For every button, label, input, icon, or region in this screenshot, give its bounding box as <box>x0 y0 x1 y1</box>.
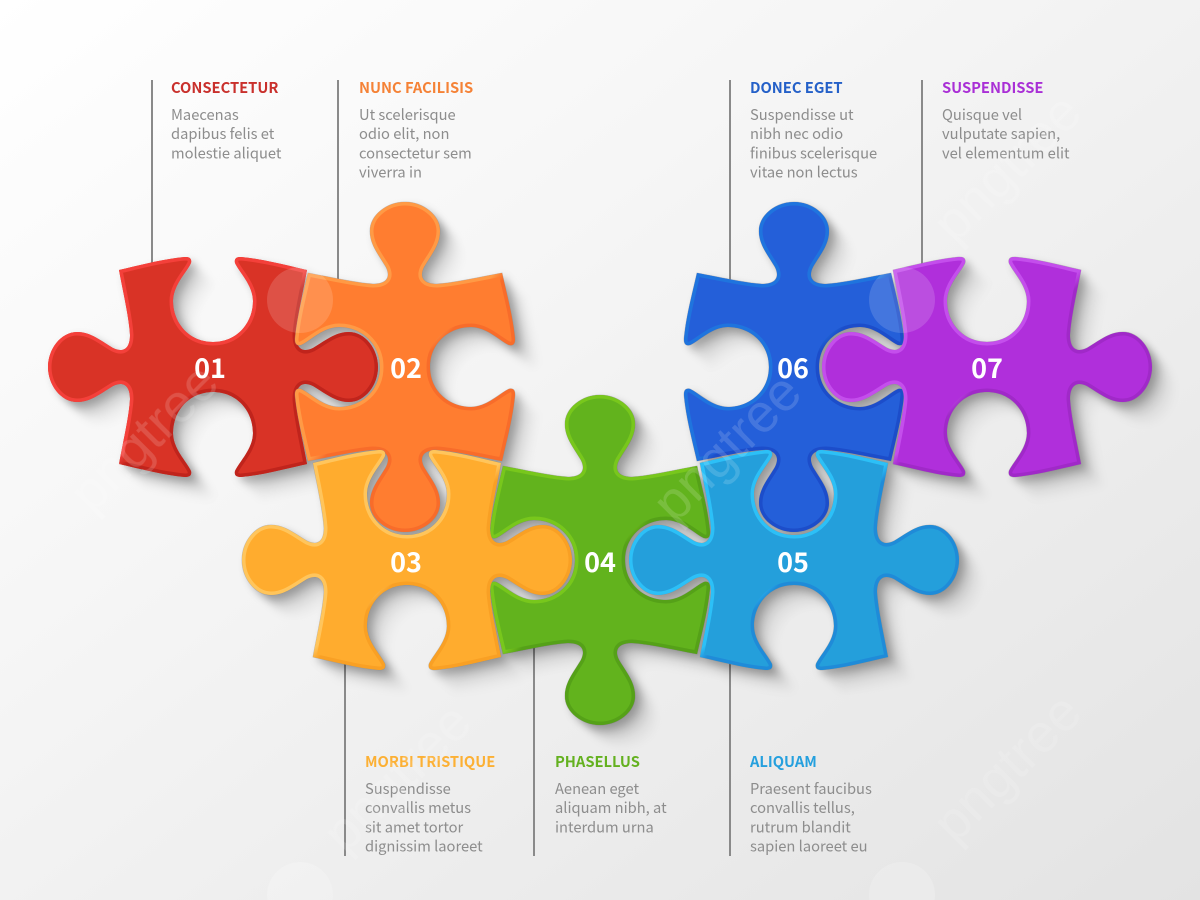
text block: nunc facilisis: viverra in <box>359 162 422 182</box>
text block: suspendisse <box>942 77 1070 164</box>
text block: consectetur: dapibus felis et <box>171 123 275 144</box>
text block: consectetur: molestie aliquet <box>171 142 282 164</box>
puzzle piece 07 <box>822 257 1152 477</box>
watermark: pngtree <box>641 362 813 533</box>
watermark: pngtree <box>921 682 1093 853</box>
text block: donec eget: nibh nec odio <box>750 123 843 144</box>
puzzle piece 02: 02 <box>390 347 422 386</box>
text block: donec eget: DONEC EGET <box>750 77 843 98</box>
text block: nunc facilisis: odio elit, non <box>359 123 449 144</box>
text block: morbi tristique: Suspendisse <box>365 778 451 799</box>
leader lines <box>152 80 922 856</box>
text block: morbi tristique: dignissim laoreet <box>365 836 483 856</box>
text block: phasellus <box>555 751 667 838</box>
text block: nunc facilisis: NUNC FACILISIS <box>359 77 473 98</box>
text block: consectetur <box>171 77 282 164</box>
text block: donec eget: Suspendisse ut <box>750 104 854 125</box>
text block: morbi tristique: sit amet tortor <box>365 816 464 838</box>
text block: consectetur: Maecenas <box>171 104 239 125</box>
text block: aliquam: convallis tellus, <box>750 797 855 818</box>
text block: phasellus: aliquam nibh, at <box>555 797 667 818</box>
puzzle piece 04 <box>490 395 710 725</box>
text block: donec eget: finibus scelerisque <box>750 142 877 164</box>
text block: suspendisse: vulputate sapien, <box>942 123 1060 144</box>
text block: aliquam: ALIQUAM <box>749 751 817 772</box>
watermark: pngtree <box>58 352 230 523</box>
text block: aliquam: Praesent faucibus <box>750 778 872 799</box>
text block: morbi tristique <box>365 751 495 856</box>
watermark <box>58 82 1093 900</box>
text block: phasellus: interdum urna <box>555 816 654 838</box>
text block: nunc facilisis: Ut scelerisque <box>359 104 456 125</box>
text block: donec eget <box>750 77 877 182</box>
text block: nunc facilisis: consectetur sem <box>359 142 472 164</box>
watermark: pngtree <box>311 692 483 863</box>
text block: phasellus: PHASELLUS <box>555 751 640 772</box>
puzzle piece 07: 07 <box>971 347 1003 386</box>
puzzle piece 04: 04 <box>584 541 616 580</box>
text block: nunc facilisis <box>359 77 473 182</box>
puzzle piece 05: 05 <box>777 541 809 580</box>
watermark: pngtree <box>921 82 1093 253</box>
text block: suspendisse: vel elementum elit <box>942 142 1070 164</box>
puzzle piece 06 <box>684 202 904 532</box>
text block: morbi tristique: convallis metus <box>365 797 471 818</box>
puzzle piece 05 <box>629 450 959 670</box>
puzzle piece 03: 03 <box>390 541 422 580</box>
text block: phasellus: Aenean eget <box>555 778 639 799</box>
text block: aliquam <box>749 751 872 856</box>
puzzle piece 06: 06 <box>777 347 809 386</box>
text block: consectetur: CONSECTETUR <box>171 77 278 98</box>
puzzle piece 03 <box>242 450 572 670</box>
text block: aliquam: rutrum blandit <box>750 816 851 838</box>
puzzle piece 02 <box>295 202 515 532</box>
piece shadows <box>52 206 1174 747</box>
text block: morbi tristique: MORBI TRISTIQUE <box>365 751 495 772</box>
text block: suspendisse: SUSPENDISSE <box>942 77 1043 98</box>
puzzle piece 01: 01 <box>194 347 226 386</box>
puzzle piece 01 <box>48 257 378 477</box>
text block: donec eget: vitae non lectus <box>750 162 858 182</box>
text block: aliquam: sapien laoreet eu <box>750 836 868 856</box>
text block: suspendisse: Quisque vel <box>942 104 1022 125</box>
